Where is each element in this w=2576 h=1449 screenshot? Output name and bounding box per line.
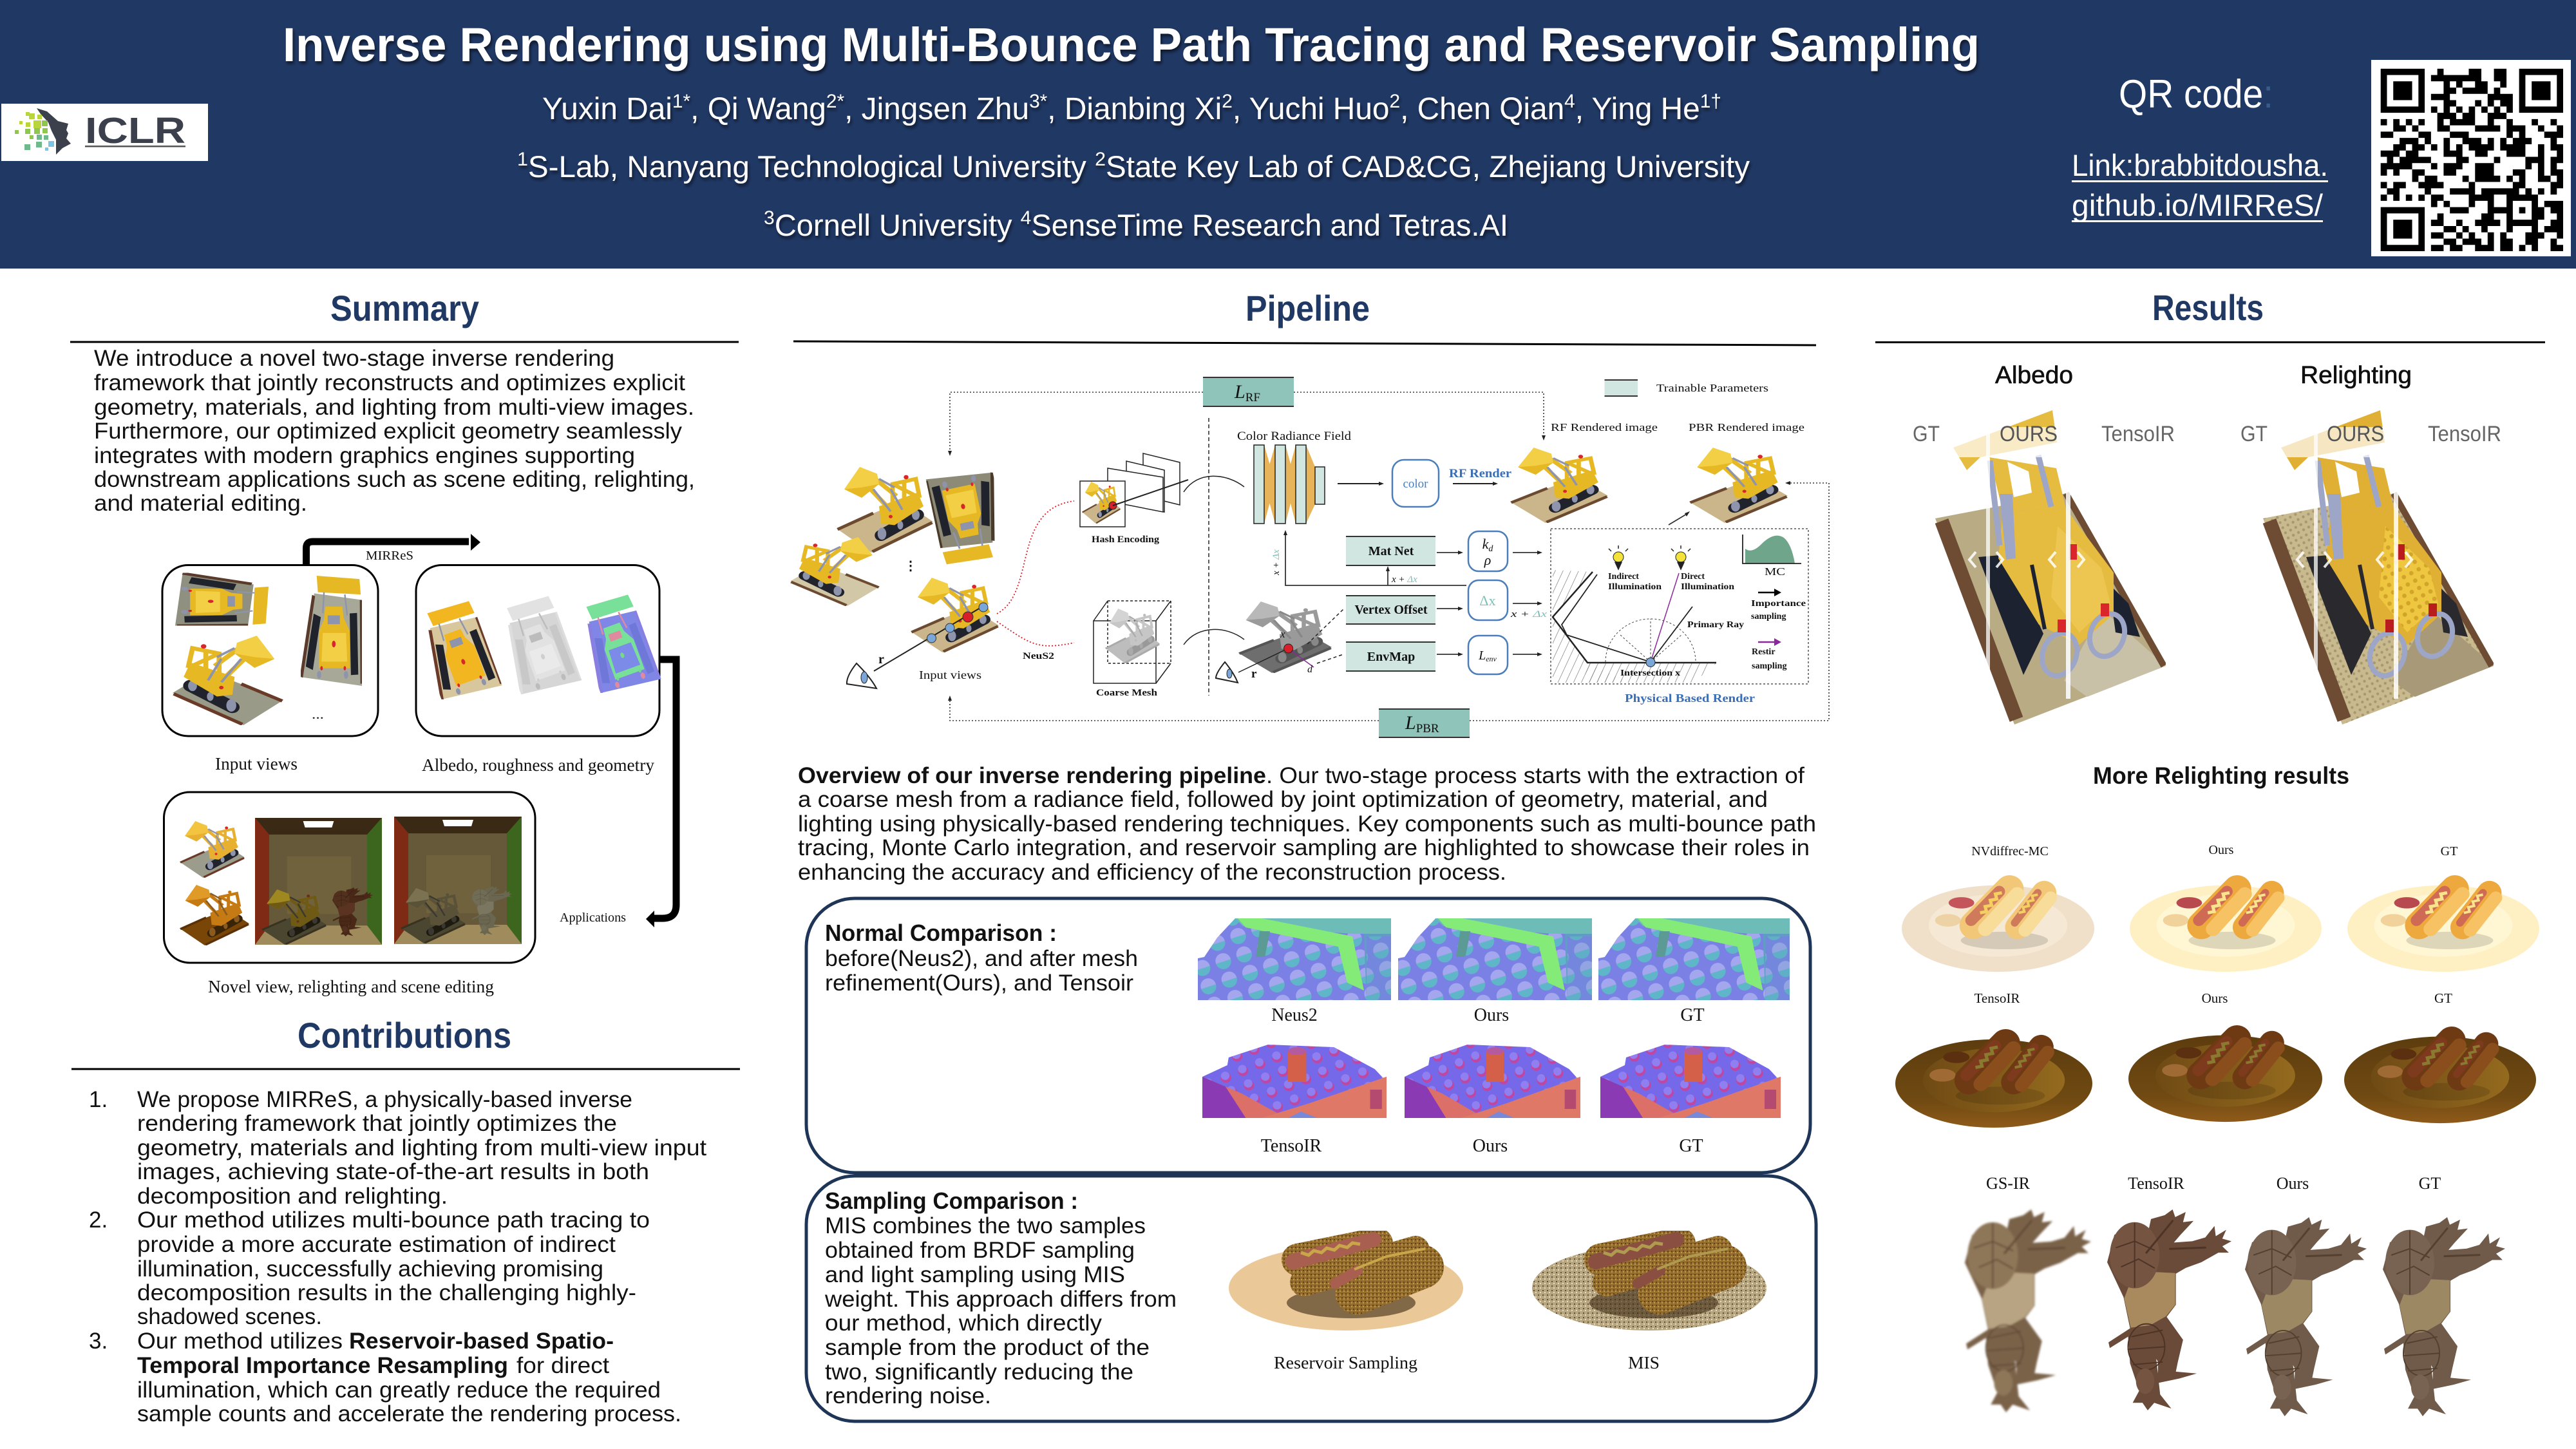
legend: importance sampling: sampling xyxy=(1751,612,1786,621)
module: EnvMap: EnvMap xyxy=(1367,650,1415,664)
output: kd rho: k xyxy=(1482,536,1488,552)
panel: summary xyxy=(70,288,739,516)
sampling comparison text: our method, which directly xyxy=(825,1311,1103,1336)
connection arrows: x + Δx xyxy=(1391,574,1417,585)
summary text: framework that jointly reconstructs and optimizes explicit xyxy=(94,370,685,395)
contributions list: 2. xyxy=(89,1208,108,1233)
label: direct illumination: Direct xyxy=(1681,572,1705,582)
authors: , Chen Qian xyxy=(1400,92,1564,126)
mesh with ray xyxy=(1216,601,1332,683)
pipeline description: Overview of our inverse rendering pipeline xyxy=(798,763,1266,788)
relighting row 3 labels xyxy=(1986,1174,2441,1193)
hash encoding: Hash Encoding xyxy=(1092,535,1160,545)
panel: input views: ... xyxy=(312,708,324,722)
legend: trainable parameters xyxy=(1605,379,1768,397)
relighting row 2 images xyxy=(1895,1036,2536,1128)
connection arrows xyxy=(1271,511,1690,656)
label: input views: Input views xyxy=(215,754,298,773)
labels: albedo columns xyxy=(1913,422,2175,446)
summary text: and material editing. xyxy=(94,491,307,516)
arrowheads: feedback loop xyxy=(948,435,1790,701)
loss box: PBR: L xyxy=(1405,712,1416,734)
authors: 2 xyxy=(1390,91,1400,112)
hatched surfaces xyxy=(1553,570,1716,683)
coarse mesh: Coarse Mesh xyxy=(1096,688,1158,698)
output: L env: env xyxy=(1486,654,1497,663)
contributions list xyxy=(89,1087,706,1426)
normal labels row 1 xyxy=(1271,1005,1705,1025)
normal labels row 1: Neus2 xyxy=(1271,1005,1318,1025)
relighting row 1 images xyxy=(1902,886,2539,972)
summary text: We introduce a novel two-stage inverse rendering xyxy=(94,346,614,371)
pipeline description: enhancing the accuracy and efficiency of the reconstruction process. xyxy=(798,860,1506,885)
pipeline diagram xyxy=(790,377,1829,738)
output: L env xyxy=(1468,636,1508,674)
relighting row 3 labels: GT xyxy=(2419,1174,2441,1193)
contributions list: decomposition and relighting. xyxy=(137,1184,448,1209)
loss box: RF xyxy=(1203,377,1294,407)
affiliations line 1: 2 xyxy=(1095,149,1106,170)
normal comparison text: refinement(Ours), and Tensoir xyxy=(825,971,1133,996)
summary text: Furthermore, our optimized explicit geometry seamlessly xyxy=(94,419,683,444)
pipeline description: tracing, Monte Carlo integration, and reservoir sampling are highlighted to showcase their roles in xyxy=(798,835,1810,860)
label: indirect illumination: Illumination xyxy=(1608,582,1662,592)
relighting row 2 labels: Ours xyxy=(2202,990,2228,1006)
chart: MC xyxy=(1743,535,1801,578)
normal labels row 2: GT xyxy=(1679,1136,1703,1156)
relighting row 2 labels: TensoIR xyxy=(1975,990,2020,1006)
panel: normal comparison xyxy=(806,898,1810,1173)
contributions list: We propose MIRReS, a physically-based inverse xyxy=(137,1087,632,1112)
sampling comparison text: two, significantly reducing the xyxy=(825,1359,1133,1385)
project link: github.io/MIRReS/ xyxy=(2072,188,2324,222)
red dotted arrows xyxy=(997,501,1074,646)
hash encoding xyxy=(1080,453,1188,545)
normal labels row 2 xyxy=(1261,1136,1703,1156)
normal labels row 1: GT xyxy=(1680,1005,1705,1025)
relighting row 1 labels: NVdiffrec-MC xyxy=(1971,844,2049,858)
authors: 4 xyxy=(1564,91,1575,112)
connection arrows: x + Δx xyxy=(1271,549,1282,576)
image: MIS hot dog xyxy=(1531,1240,1766,1331)
label: novel view: Novel view, relighting and scene editing xyxy=(208,977,494,996)
contributions list: Our method utilizes multi-bounce path tracing to xyxy=(137,1208,650,1233)
contributions list: Reservoir-based Spatio- xyxy=(349,1329,614,1354)
label: MIS: MIS xyxy=(1628,1353,1660,1372)
panel: results xyxy=(1875,287,2545,1416)
legend: restir sampling xyxy=(1752,638,1786,671)
label: applications: Applications xyxy=(560,911,626,925)
affiliations line 1: S-Lab, Nanyang Technological University xyxy=(528,149,1095,184)
label: RF render: RF Render xyxy=(1449,467,1512,480)
input view images: ⋮ xyxy=(904,559,917,573)
relighting row 3 images xyxy=(1965,1209,2505,1416)
affiliations line 2: SenseTime Research and Tetras.AI xyxy=(1031,208,1508,242)
module: Vertex Offset xyxy=(1346,595,1435,625)
output: kd rho xyxy=(1468,531,1508,571)
legend: importance sampling: Importance xyxy=(1751,599,1806,609)
contributions list: for direct xyxy=(516,1353,609,1378)
labels: albedo columns: GT xyxy=(1913,422,1940,446)
summary text xyxy=(94,346,695,516)
radiance field network xyxy=(1237,430,1352,524)
curved arrow xyxy=(1184,476,1244,492)
heading: relighting: Relighting xyxy=(2300,362,2412,389)
authors: , Yuchi Huo xyxy=(1233,92,1390,126)
panel: contributions xyxy=(71,1015,740,1426)
sampling comparison text xyxy=(824,1213,1177,1408)
affiliations line 2: 3 xyxy=(764,207,775,229)
module: EnvMap xyxy=(1346,641,1435,672)
header banner xyxy=(0,0,2576,269)
PBR rendered image: PBR Rendered image xyxy=(1689,421,1804,433)
mesh with ray: x xyxy=(1280,628,1285,640)
contributions list: illumination, which can greatly reduce the required xyxy=(137,1378,661,1403)
contributions list: rendering framework that jointly optimizes the xyxy=(137,1111,617,1136)
sampling comparison text: MIS combines the two samples xyxy=(825,1213,1146,1238)
labels: relighting columns xyxy=(2240,422,2501,446)
image: albedo comparison xyxy=(1935,410,2166,724)
curved arrow xyxy=(1184,629,1244,645)
legend: trainable parameters: Trainable Parameters xyxy=(1656,382,1768,394)
loss box: PBR: PBR xyxy=(1416,722,1439,735)
output: kd rho: ρ xyxy=(1484,552,1491,568)
ICLR wordmark: ICLR xyxy=(85,110,185,151)
labels: relighting columns: OURS xyxy=(2327,422,2384,446)
legend: importance sampling xyxy=(1751,589,1806,621)
affiliations line 1: State Key Lab of CAD&CG, Zhejiang University xyxy=(1106,149,1750,184)
relighting row 2 labels xyxy=(1975,990,2452,1006)
sampling comparison text: sample from the product of the xyxy=(825,1335,1150,1360)
heading: contributions: Contributions xyxy=(298,1015,511,1056)
pipeline description xyxy=(798,763,1816,885)
output: L env: L xyxy=(1479,649,1486,663)
contributions list: decomposition results in the challenging highly- xyxy=(137,1280,636,1305)
sampling comparison text: weight. This approach differs from xyxy=(824,1287,1177,1312)
sampling comparison text: and light sampling using MIS xyxy=(825,1262,1125,1287)
label: albedo, roughness and geometry: Albedo, roughness and geometry xyxy=(422,755,655,775)
arrow: MIRReS xyxy=(307,534,480,565)
relighting row 1 labels: GT xyxy=(2441,844,2458,858)
heading: sampling comparison: Sampling Comparison : xyxy=(825,1188,1078,1214)
contributions list: 1. xyxy=(89,1087,108,1112)
heading: pipeline: Pipeline xyxy=(1245,288,1370,328)
relighting row 1 labels xyxy=(1971,843,2458,858)
loss box: PBR xyxy=(1379,708,1470,738)
label: indirect illumination: Indirect xyxy=(1608,572,1639,582)
contributions list: geometry, materials and lighting from multi-view input xyxy=(137,1135,706,1160)
relighting row 1 labels: Ours xyxy=(2209,843,2234,857)
authors: 2 xyxy=(1222,91,1233,112)
summary text: integrates with modern graphics engines supporting xyxy=(94,443,635,468)
mesh with ray: d xyxy=(1307,664,1313,675)
panel: sampling comparison xyxy=(806,1176,1816,1421)
output: kd rho: d xyxy=(1488,544,1493,554)
PBR rendered image xyxy=(1689,421,1804,523)
mesh with ray: r xyxy=(1251,667,1257,681)
heading: normal comparison: Normal Comparison : xyxy=(825,920,1057,946)
label: MIRReS: MIRReS xyxy=(366,549,413,563)
heading: albedo: Albedo xyxy=(1995,362,2073,389)
module: Vertex Offset: Vertex Offset xyxy=(1354,603,1428,617)
normal maps row 2 xyxy=(1202,1045,1781,1118)
authors: , Jingsen Zhu xyxy=(844,92,1029,126)
module: Mat Net xyxy=(1346,536,1435,566)
authors: 3* xyxy=(1029,91,1048,112)
authors: , Ying He xyxy=(1575,92,1700,126)
ICLR logo xyxy=(1,104,208,161)
legend: restir sampling: sampling xyxy=(1752,661,1786,671)
feedback loop lines xyxy=(950,392,1829,721)
pipeline description: lighting using physically-based rendering techniques. Key components such as multi-bounce path xyxy=(798,811,1816,837)
arrow: applications xyxy=(646,659,676,927)
pipeline description: . Our two-stage process starts with the extraction of xyxy=(1266,763,1804,788)
coarse mesh xyxy=(1094,601,1171,698)
ray and sample points xyxy=(847,603,988,688)
image: relighting comparison xyxy=(2263,410,2494,724)
summary text: geometry, materials, and lighting from multi-view images. xyxy=(94,395,694,420)
legend: restir sampling: Restir xyxy=(1752,647,1776,657)
authors: , Dianbing Xi xyxy=(1047,92,1222,126)
contributions list: images, achieving state-of-the-art results in both xyxy=(137,1159,649,1184)
relighting row 3 labels: TensoIR xyxy=(2128,1174,2185,1193)
affiliations line 1: 1 xyxy=(517,149,528,170)
sampling comparison text: obtained from BRDF sampling xyxy=(825,1238,1135,1263)
output: delta x: Δx xyxy=(1479,592,1496,609)
contributions list: illumination, successfully achieving promising xyxy=(137,1256,603,1282)
label: intersection: Intersection x xyxy=(1620,668,1680,678)
ray and sample points: r xyxy=(878,652,884,667)
sampling comparison text: rendering noise. xyxy=(825,1383,991,1408)
normal comparison text: before(Neus2), and after mesh xyxy=(825,946,1138,971)
authors: 2* xyxy=(826,91,844,112)
pipeline description: a coarse mesh from a radiance field, followed by joint optimization of geometry, material, and xyxy=(798,787,1768,812)
icon: indirect light bulb xyxy=(1609,545,1628,569)
normal maps row 1 xyxy=(1198,918,1790,1000)
heading: results: Results xyxy=(2152,287,2264,328)
project link: Link:brabbitdousha. xyxy=(2072,148,2328,182)
label: physical based render: Physical Based Render xyxy=(1625,692,1755,705)
color output: color xyxy=(1403,477,1428,491)
contributions list: provide a more accurate estimation of indirect xyxy=(137,1232,616,1257)
image: reservoir sampling hot dog xyxy=(1229,1240,1463,1331)
labels: relighting columns: GT xyxy=(2240,422,2268,446)
chart: MC: MC xyxy=(1765,565,1785,578)
label: input views: Input views xyxy=(919,668,981,681)
affiliations line 2: Cornell University xyxy=(775,208,1021,242)
summary text: downstream applications such as scene editing, relighting, xyxy=(94,467,695,492)
labels: albedo columns: TensoIR xyxy=(2101,422,2175,446)
RF rendered image xyxy=(1510,421,1658,523)
affiliations line 2: 4 xyxy=(1021,207,1031,229)
authors: 1† xyxy=(1700,91,1721,112)
label: primary ray: Primary Ray xyxy=(1687,620,1744,630)
loss box: RF: RF xyxy=(1245,391,1260,404)
labels: albedo columns: OURS xyxy=(2000,422,2058,446)
module: Mat Net: Mat Net xyxy=(1368,544,1414,558)
divider: pipeline rule xyxy=(793,341,1816,345)
label: NeuS2: NeuS2 xyxy=(1023,651,1054,661)
label: RF render xyxy=(1449,467,1512,486)
normal comparison text xyxy=(825,946,1138,996)
QR code label: QR code: xyxy=(2119,72,2273,117)
contributions list: Our method utilizes xyxy=(137,1329,343,1354)
image: scene edit room 2 xyxy=(394,817,522,944)
relighting row 2 labels: GT xyxy=(2434,990,2452,1006)
panel: decomposition outputs xyxy=(412,565,661,736)
dashed arrows into networks xyxy=(1307,609,1343,663)
authors: Yuxin Dai xyxy=(542,92,673,126)
relighting row 3 labels: GS-IR xyxy=(1986,1174,2031,1193)
authors: , Qi Wang xyxy=(690,92,826,126)
loss box: RF: L xyxy=(1235,381,1245,402)
label: reservoir sampling: Reservoir Sampling xyxy=(1274,1353,1417,1372)
normal labels row 1: Ours xyxy=(1474,1005,1509,1025)
authors: 1* xyxy=(672,91,690,112)
contributions list: shadowed scenes. xyxy=(137,1304,322,1329)
relighting row 3 labels: Ours xyxy=(2277,1174,2309,1193)
heading: summary: Summary xyxy=(330,288,479,328)
normal labels row 2: TensoIR xyxy=(1261,1136,1322,1156)
radiance field network: Color Radiance Field xyxy=(1237,430,1352,443)
input view images xyxy=(790,466,1010,652)
contributions list: sample counts and accelerate the rendering process. xyxy=(137,1401,681,1426)
image: scene edit room 1 xyxy=(255,818,382,945)
contributions list: Temporal Importance Resampling xyxy=(137,1353,508,1378)
contributions list: 3. xyxy=(89,1329,108,1354)
project link xyxy=(2072,148,2328,222)
normal labels row 2: Ours xyxy=(1473,1136,1508,1156)
panel: applications xyxy=(164,792,535,963)
light rays xyxy=(1562,573,1696,662)
panel: physical based render xyxy=(1551,529,1808,684)
panel: input views xyxy=(162,565,378,736)
title: Inverse Rendering using Multi-Bounce Path Tracing and Reservoir Sampling xyxy=(283,18,1980,71)
label: direct illumination: Illumination xyxy=(1681,582,1734,592)
output: delta x xyxy=(1468,580,1508,620)
QR code xyxy=(2371,60,2571,256)
RF rendered image: RF Rendered image xyxy=(1551,421,1658,433)
figure: MIRReS workflow xyxy=(162,534,676,996)
connection arrows: x + Δx xyxy=(1510,609,1547,620)
labels: relighting columns: TensoIR xyxy=(2428,422,2501,446)
icon: direct light bulb xyxy=(1671,545,1690,569)
heading: more relighting results: More Relighting results xyxy=(2093,762,2349,789)
color output xyxy=(1338,460,1439,507)
